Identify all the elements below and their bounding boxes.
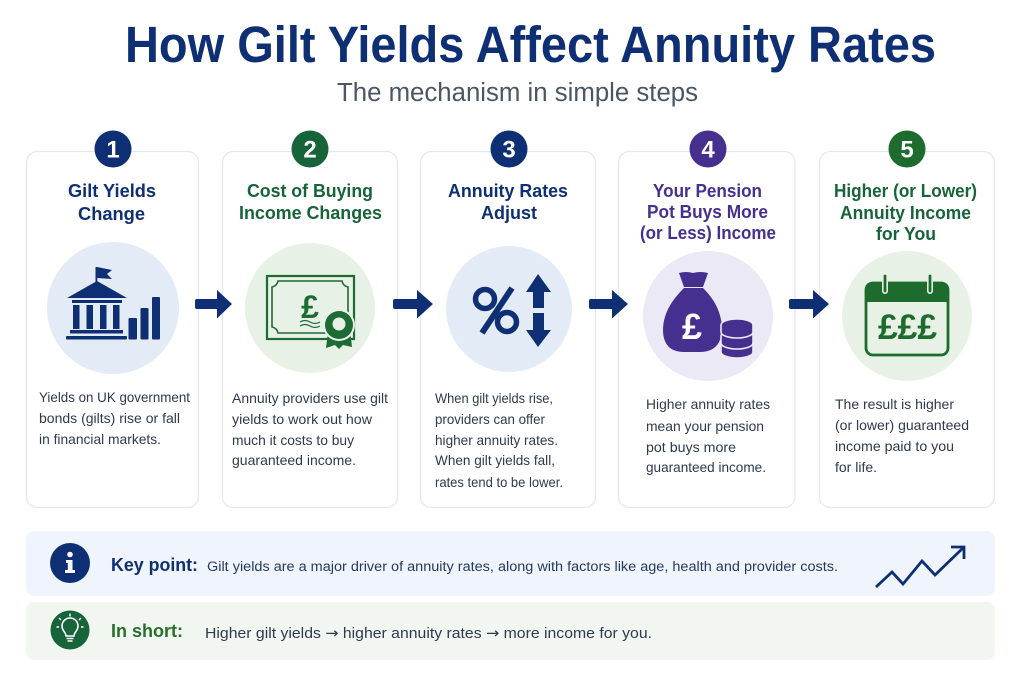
step 3 description: rates tend to be lower. — [435, 475, 563, 490]
panel: step 2 cost of buying income changes — [222, 130, 398, 508]
step 4 heading: Pot Buys More — [647, 201, 768, 222]
step 2 description: much it costs to buy — [232, 433, 354, 448]
panel: step 4 pension pot buys more or less income — [618, 130, 795, 508]
step 5 description: (or lower) guaranteed — [835, 418, 969, 433]
step 2 number badge: 2 — [303, 136, 317, 164]
step 1 number badge: 1 — [106, 136, 120, 164]
in short label: In short: — [111, 620, 183, 641]
panel: step 5 higher or lower annuity income — [820, 130, 994, 508]
panel: step 3 annuity rates adjust — [420, 130, 596, 508]
step 3 description: When gilt yields fall, — [435, 453, 555, 468]
step 1 description: bonds (gilts) rise or fall — [39, 411, 180, 426]
step 5 heading — [834, 180, 977, 244]
icon: light bulb — [50, 610, 90, 650]
step 1 heading: Change — [78, 203, 145, 224]
step 1 number badge — [94, 130, 132, 168]
step 4 icon: money bag with coins: £ — [682, 306, 702, 347]
step 3 number badge — [490, 130, 528, 168]
step 2 number badge — [292, 130, 328, 168]
in short text: Higher gilt yields → higher annuity rates → more income for you. — [205, 625, 652, 642]
panel: step 1 gilt yields change — [26, 130, 198, 508]
step 5 description: income paid to you — [835, 439, 954, 454]
step 3 number badge: 3 — [502, 136, 516, 164]
step 4 heading — [640, 180, 776, 243]
step 2 icon: certificate with pound sign and rosette — [245, 243, 375, 373]
step 5 description — [835, 397, 969, 475]
step 4 number badge — [690, 130, 726, 168]
step 2 description — [232, 391, 388, 468]
subtitle: The mechanism in simple steps — [337, 79, 698, 107]
step 3 description: providers can offer — [435, 412, 545, 427]
step 3 icon: percent sign with up and down arrows — [446, 246, 572, 372]
step 5 icon: calendar with pound signs — [842, 251, 972, 381]
step 2 icon: certificate with pound sign and rosette: £ — [301, 289, 319, 325]
step 5 description: for life. — [835, 460, 877, 475]
step 3 description: higher annuity rates. — [435, 433, 558, 448]
panel: in short — [26, 602, 995, 660]
step 4 description: Higher annuity rates — [646, 397, 770, 412]
step 5 description: The result is higher — [835, 397, 954, 412]
arrow: step 3 to 4 — [589, 290, 628, 318]
step 5 number badge — [888, 130, 926, 168]
step 1 description: Yields on UK government — [39, 390, 190, 405]
step 2 heading: Cost of Buying — [247, 180, 373, 201]
step 2 heading — [239, 180, 382, 223]
step 4 number badge: 4 — [701, 136, 715, 164]
step 4 icon: money bag with coins — [643, 251, 773, 381]
step 1 description: in financial markets. — [39, 432, 161, 447]
step 4 description: mean your pension — [646, 419, 764, 434]
step 4 description: guaranteed income. — [646, 460, 766, 475]
step 1 icon: government building and bars — [47, 242, 179, 374]
icon: rising trend arrow — [876, 547, 964, 587]
step 2 description: yields to work out how — [232, 412, 372, 427]
step 5 number badge: 5 — [900, 136, 914, 164]
arrow: step 4 to 5 — [789, 290, 829, 318]
arrow: step 2 to 3 — [393, 290, 433, 318]
step 4 description: pot buys more — [646, 440, 736, 455]
step 4 heading: Your Pension — [653, 180, 762, 201]
panel: key point — [26, 531, 995, 596]
step 3 heading — [448, 180, 568, 223]
title: How Gilt Yields Affect Annuity Rates — [125, 16, 936, 73]
key point label: Key point: — [111, 554, 198, 575]
step 3 heading: Annuity Rates — [448, 180, 568, 201]
step 2 heading: Income Changes — [239, 202, 382, 223]
step 3 description: When gilt yields rise, — [435, 391, 553, 406]
step 5 heading: for You — [876, 223, 936, 244]
step 1 description — [39, 390, 190, 447]
step 4 description — [646, 397, 770, 475]
arrow: step 1 to 2 — [195, 290, 232, 318]
step 5 heading: Higher (or Lower) — [834, 180, 977, 201]
step 2 description: Annuity providers use gilt — [232, 391, 388, 406]
step 2 description: guaranteed income. — [232, 453, 356, 468]
step 1 heading — [68, 180, 156, 224]
step 1 heading: Gilt Yields — [68, 180, 156, 201]
step 3 heading: Adjust — [481, 202, 537, 223]
step 4 heading: (or Less) Income — [640, 222, 776, 243]
key point text: Gilt yields are a major driver of annuity rates, along with factors like age, health and provider costs. — [207, 559, 838, 575]
step 3 description — [435, 391, 563, 490]
step 5 icon: calendar with pound signs: £££ — [878, 308, 938, 347]
step 5 heading: Annuity Income — [840, 202, 971, 223]
icon: information — [50, 543, 90, 583]
